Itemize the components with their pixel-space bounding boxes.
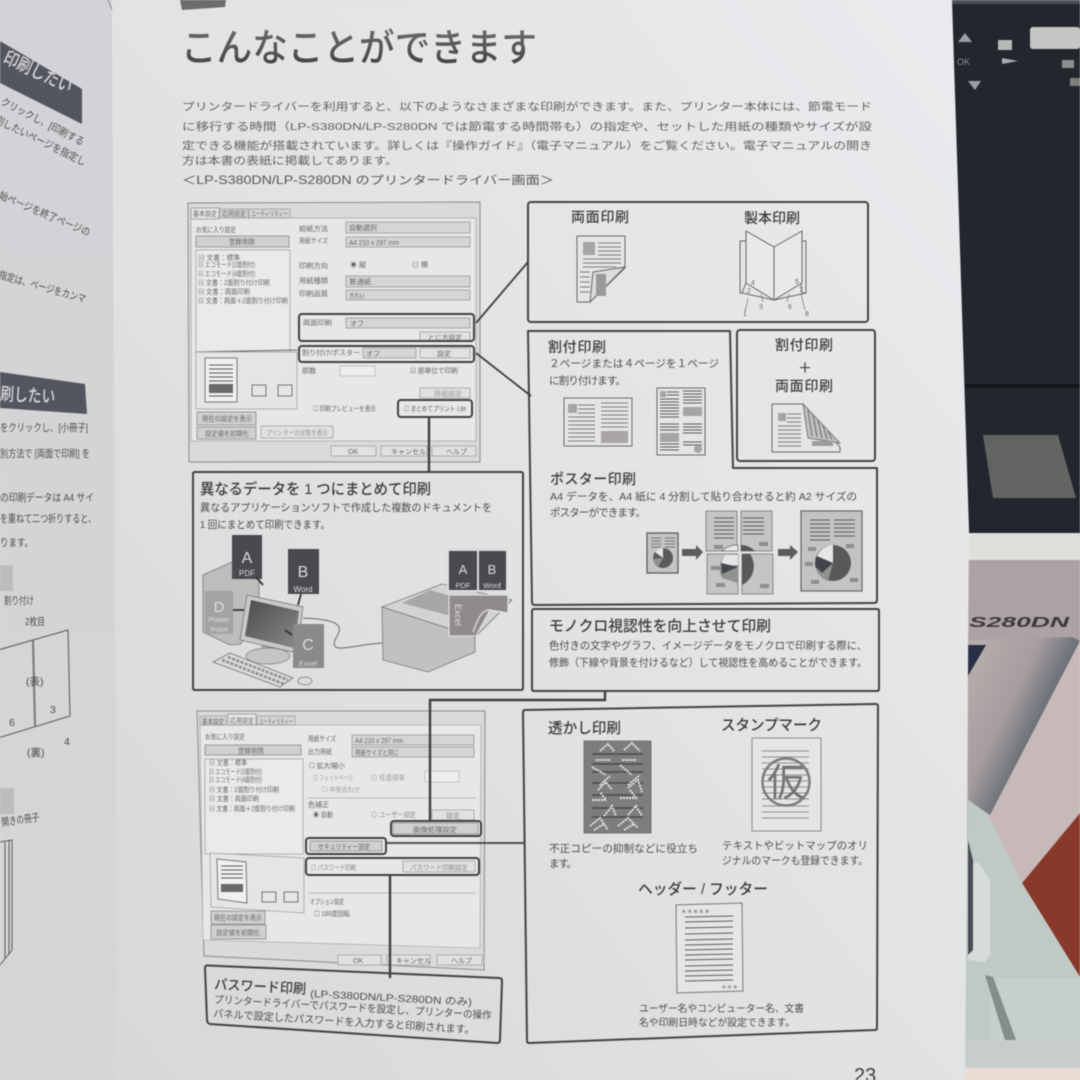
- illustration: PC with documents: Power: [208, 615, 230, 624]
- driver dialog: advanced settings: 設定: [446, 812, 460, 820]
- illustration: PC with documents: D: [214, 599, 225, 616]
- left facing page: 別方法で [両面で印刷] を: [0, 447, 90, 460]
- driver dialog: basic settings: ヘルプ: [446, 448, 467, 456]
- arrow: [778, 545, 798, 560]
- panel: N-up + duplex: 割付印刷: [775, 337, 833, 353]
- panel: password printing: パスワード印刷: [214, 976, 307, 997]
- icon: stamp mark page: [752, 738, 821, 831]
- panel: merge different data: [193, 472, 523, 690]
- illustration: printer with merged output: B: [488, 562, 496, 577]
- driver dialog: advanced settings: 出力用紙: [308, 747, 332, 756]
- icon: large finished poster: [801, 511, 862, 591]
- panel: N-up and poster printing: [528, 331, 877, 605]
- panel: watermark, stamp mark, header/footer: 不正コピーの抑制などに役立ち: [549, 842, 698, 855]
- driver dialog: advanced settings: ☐ 拡大/縮小: [309, 761, 345, 770]
- driver dialog: advanced settings: OK: [353, 958, 363, 965]
- driver dialog: basic settings: ▤ 文書：標準: [198, 253, 240, 262]
- driver dialog: advanced settings: [197, 711, 485, 970]
- main manual page: [112, 0, 969, 1080]
- driver dialog: basic settings: ◎ 横: [412, 260, 428, 269]
- left facing page: 始ページを終了ページの: [0, 189, 92, 239]
- panel: password printing: パネルで設定したパスワードを入力すると印刷されます。: [213, 1007, 475, 1036]
- driver screen caption: ＜LP-S380DN/LP-S280DN のプリンタードライバー画面＞: [182, 174, 554, 187]
- driver dialog: basic settings: ▤ エコモード(4面割付): [198, 269, 255, 278]
- icon: duplex page: [577, 236, 625, 302]
- driver dialog: basic settings: キャンセル: [391, 448, 426, 456]
- icon: header/footer page: ＊＊＊: [721, 984, 738, 991]
- driver dialog: advanced settings: ▤ 文書：2面割り付け印刷: [209, 785, 279, 794]
- driver dialog: basic settings: 設定: [437, 350, 451, 358]
- illustration: printer with merged output: A: [459, 562, 468, 577]
- icon: booklet: 3: [759, 304, 763, 311]
- icon: booklet: 1: [743, 311, 747, 318]
- driver dialog: advanced settings: ◎ 任意倍率: [371, 773, 405, 782]
- left facing page: 印刷したい: [0, 47, 76, 97]
- panel: watermark, stamp mark, header/footer: ます。: [549, 858, 577, 870]
- illustration: printer with merged output: [382, 548, 512, 672]
- panel: N-up and poster printing: ポスター印刷: [550, 471, 636, 487]
- driver dialog: advanced settings: 現在の設定を表示: [214, 913, 262, 922]
- driver dialog: basic settings: お気に入り設定: [196, 225, 236, 234]
- driver dialog: basic settings: ▤ 文書：両面印刷: [198, 287, 250, 296]
- driver dialog: advanced settings: ◉ 自動: [313, 810, 333, 819]
- driver dialog: basic settings: 用紙サイズ: [299, 236, 328, 245]
- driver dialog: basic settings: とじ方設定: [428, 333, 462, 342]
- panel: N-up and poster printing: ポスターができます。: [550, 506, 646, 519]
- icon: booklet: 6: [788, 304, 792, 311]
- panel: N-up + duplex: 両面印刷: [775, 378, 833, 394]
- panel: monochrome visibility: モノクロ視認性を向上させて印刷: [549, 618, 771, 635]
- driver dialog: basic settings: 自動選択: [349, 223, 377, 232]
- arrow: [682, 545, 703, 560]
- icon: booklet: 2: [747, 288, 751, 295]
- panel: password printing: プリンタードライバーでパスワードを設定し、プリンターの操作: [214, 993, 493, 1022]
- left facing page: 割り付け: [4, 594, 34, 607]
- left facing page: [0, 0, 118, 1080]
- driver dialog: basic settings: ▤ 文書：両面＋2面割り付け印刷: [198, 296, 288, 305]
- driver dialog: basic settings: OK: [348, 449, 358, 456]
- driver dialog: basic settings: プリンターの状態を表示: [266, 428, 328, 437]
- left facing page: 2枚目: [25, 615, 45, 628]
- illustration: PC with documents: Point: [210, 625, 228, 634]
- panel: merge different data: 1 回にまとめて印刷できます。: [200, 518, 330, 531]
- driver dialog: advanced settings: ヘルプ: [451, 957, 472, 965]
- intro paragraph: プリンタードライバーを利用すると、以下のようなさまざまな印刷ができます。また、プリンター本体には、節電モード: [182, 100, 872, 113]
- driver dialog: advanced settings: 用紙サイズ: [308, 734, 336, 743]
- driver dialog: advanced settings: ▤ エコモード(4面割付): [209, 775, 262, 784]
- driver dialog: basic settings: ユーティリティー: [251, 210, 288, 218]
- left facing page: 4: [64, 736, 70, 748]
- panel: password printing: [205, 965, 502, 1043]
- panel: duplex and booklet printing: 両面印刷: [571, 209, 629, 225]
- left facing page: 開きの冊子: [1, 812, 40, 829]
- panel: N-up + duplex: ＋: [798, 360, 812, 376]
- driver dialog: advanced settings: ▤ 文書：両面＋2面割り付け印刷: [209, 804, 295, 813]
- intro paragraph: 定できる機能が搭載されています。詳しくは『操作ガイド』（電子マニュアル）をご覧ください。電子マニュアルの開き: [182, 139, 872, 152]
- section tab: [180, 0, 226, 10]
- driver dialog: advanced settings: 基本設定: [202, 717, 224, 726]
- panel: N-up and poster printing: A4 データを、A4 紙に 4 分割して貼り合わせると約 A2 サイズの: [550, 490, 857, 503]
- panel: N-up and poster printing: に割り付けます。: [549, 374, 626, 387]
- panel: monochrome visibility: 色付きの文字やグラフ、イメージデータをモノクロで印刷する際に、: [549, 639, 867, 652]
- icon: 4-up page: [657, 388, 705, 455]
- driver dialog: advanced settings: ユーティリティー: [259, 718, 293, 726]
- icon: 2-up page: [564, 398, 632, 446]
- driver dialog: advanced settings: キャンセル: [396, 957, 431, 965]
- icon: booklet: 7: [799, 287, 803, 294]
- illustration: PC with documents: C: [302, 637, 314, 654]
- left facing page: 指定は、ページをカンマ: [0, 268, 87, 306]
- driver dialog: basic settings: ▤ 文書：2面割り付け印刷: [198, 278, 270, 287]
- panel: merge different data: 異なるアプリケーションソフトで作成した複数のドキュメントを: [200, 501, 492, 514]
- driver dialog: advanced settings: ◎ フィットページ: [313, 774, 353, 782]
- left facing page: クリックし、[印刷する: [0, 95, 87, 148]
- icon: booklet: 5: [795, 279, 799, 286]
- driver dialog: basic settings: 登録/削除: [229, 237, 255, 246]
- driver dialog: basic settings: 部数: [302, 366, 316, 375]
- driver dialog: advanced settings: 登録/削除: [238, 746, 264, 755]
- driver dialog: basic settings: ☑ 部単位で印刷: [410, 366, 458, 375]
- title: こんなことができます: [181, 28, 537, 70]
- driver dialog: advanced settings: パスワード印刷設定: [410, 863, 468, 872]
- icon: header/footer page: ＊＊＊＊＊: [681, 909, 710, 916]
- icon: four poster pieces: [706, 511, 773, 594]
- driver dialog: basic settings: 設定値を初期化: [205, 429, 249, 438]
- icon: booklet: [740, 231, 809, 318]
- left facing page: 6: [9, 717, 15, 729]
- driver dialog: basic settings: 印刷方向: [299, 261, 328, 270]
- panel: N-up + duplex: [737, 330, 875, 461]
- panel: N-up and poster printing: ２ページまたは４ページを１ページ: [549, 358, 719, 370]
- driver dialog: advanced settings: A4 210 x 297 mm: [355, 738, 403, 745]
- driver dialog: advanced settings: お気に入り設定: [205, 732, 245, 741]
- driver dialog: basic settings: 基本設定: [193, 209, 217, 218]
- driver dialog: basic settings: 用紙種類: [299, 276, 328, 285]
- illustration: PC with documents: PDF: [239, 569, 255, 578]
- panel: watermark, stamp mark, header/footer: ジナルのマークも登録できます。: [722, 854, 868, 867]
- driver dialog: basic settings: きれい: [349, 292, 365, 300]
- driver dialog: basic settings: 両面印刷: [303, 318, 332, 327]
- icon: folded N-up page: [772, 404, 840, 452]
- printer model label: S280DN: [969, 614, 1071, 631]
- illustration: PC with documents: [203, 535, 382, 687]
- driver dialog: advanced settings: ☐ 中央合わせ: [322, 785, 360, 794]
- driver dialog: basic settings: 給紙方法: [299, 224, 328, 233]
- driver dialog: basic settings: A4 210 x 297 mm: [349, 240, 399, 247]
- left facing page: を重ねて二つ折りすると、: [0, 512, 96, 525]
- driver dialog: basic settings: 現在の設定を表示: [202, 414, 252, 423]
- background: printer and desk on the right: [940, 0, 1080, 1080]
- driver dialog: advanced settings: 用紙サイズと同じ: [355, 748, 399, 757]
- left facing page: の印刷データは A4 サイ: [0, 491, 94, 504]
- icon: booklet: 8: [805, 311, 809, 318]
- driver dialog: basic settings: 印刷品質: [299, 289, 328, 298]
- left facing page: 刷したい: [0, 384, 56, 407]
- panel: merge different data: 異なるデータを 1 つにまとめて印刷: [200, 480, 431, 498]
- illustration: PC with documents: B: [298, 564, 308, 581]
- driver dialog: advanced settings: 画像処理設定: [413, 825, 457, 834]
- illustration: PC with documents: Word: [294, 585, 312, 594]
- driver dialog: advanced settings: ☐ パスワード印刷: [311, 863, 356, 872]
- panel: monochrome visibility: [532, 609, 879, 691]
- driver dialog: advanced settings: ◎ ユーザー設定: [371, 811, 416, 819]
- connector lines: dialogs to panels: [387, 262, 605, 978]
- driver dialog: basic settings: 応用設定: [222, 210, 246, 218]
- panel: watermark, stamp mark, header/footer: [523, 704, 878, 1043]
- left facing page: 3: [50, 704, 56, 716]
- driver dialog: basic settings: ☐ まとめてプリント Lite: [404, 405, 466, 413]
- icon: header/footer page: [676, 903, 743, 993]
- intro paragraph: 方は本書の表紙に掲載してあります。: [182, 154, 398, 167]
- left facing page: をクリックし、[小冊子]: [0, 422, 88, 434]
- driver dialog: advanced settings: ▤ エコモード(2面割付): [209, 767, 262, 776]
- panel: password printing: (LP-S380DN/LP-S280DN のみ): [310, 989, 472, 1008]
- driver dialog: basic settings: ◉ 縦: [350, 260, 366, 269]
- driver dialog: basic settings: 排紙設定: [434, 389, 462, 398]
- driver dialog: basic settings: ▤ エコモード(2面割付): [198, 260, 255, 269]
- driver dialog: advanced settings: ▤ 文書：両面印刷: [209, 794, 259, 803]
- illustration: PC with documents: A: [242, 550, 253, 567]
- left facing page: (裏): [27, 746, 44, 759]
- panel: monochrome visibility: 修飾（下線や背景を付けるなど）して視認性を高めることができます。: [549, 656, 867, 669]
- panel: watermark, stamp mark, header/footer: スタンプマーク: [721, 717, 822, 734]
- intro paragraph: [182, 100, 873, 167]
- panel: watermark, stamp mark, header/footer: テキストやビットマップのオリ: [722, 840, 868, 852]
- left facing page: (表): [26, 676, 44, 688]
- panel: watermark, stamp mark, header/footer: 透かし印刷: [548, 720, 621, 737]
- driver dialog: basic settings: ☐ 印刷プレビューを表示: [313, 404, 376, 413]
- left facing page: ります。: [0, 537, 33, 549]
- printer control panel: [957, 27, 1080, 498]
- driver dialog: advanced settings: オプション設定: [310, 898, 344, 906]
- panel: watermark, stamp mark, header/footer: ユーザー名やコンピューター名、文書: [639, 1002, 804, 1015]
- driver dialog: advanced settings: 設定値を初期化: [216, 928, 260, 937]
- driver dialog: advanced settings: 応用設定: [230, 717, 254, 725]
- panel: duplex and booklet printing: 製本印刷: [744, 210, 800, 226]
- illustration: printer with merged output: Excel: [453, 604, 463, 626]
- icon: booklet: 4: [751, 280, 755, 287]
- driver dialog: advanced settings: ☐ 180度回転: [314, 909, 350, 918]
- panel: N-up and poster printing: 割付印刷: [548, 339, 606, 355]
- panel: watermark, stamp mark, header/footer: 名や印刷日時などが設定できます。: [639, 1016, 795, 1029]
- driver dialog: advanced settings: セキュリティー設定: [318, 843, 370, 851]
- panel: duplex and booklet printing: [528, 202, 868, 322]
- driver dialog: basic settings: オフ: [366, 350, 380, 358]
- driver dialog: basic settings: 割り付け/ポスター: [302, 348, 360, 357]
- driver dialog: advanced settings: 色補正: [308, 800, 329, 809]
- intro paragraph: に移行する時間（LP-S380DN/LP-S280DN では節電する時間帯も）の指定や、セットした用紙の種類やサイズが設: [182, 120, 873, 133]
- driver dialog: basic settings: 普通紙: [349, 277, 371, 286]
- icon: small source poster: [647, 533, 678, 573]
- printer control panel: OK: [957, 57, 970, 67]
- icon: stamp mark page: 仮: [767, 763, 805, 805]
- panel: watermark, stamp mark, header/footer: ヘッダー / フッター: [638, 880, 768, 898]
- driver dialog: basic settings: オフ: [350, 320, 364, 328]
- driver dialog: basic settings: [188, 202, 480, 462]
- illustration: printer with merged output: PDF: [456, 581, 471, 590]
- icon: watermark page: [584, 741, 651, 833]
- illustration: printer with merged output: Word: [483, 581, 501, 590]
- illustration: PC with documents: Excel: [299, 659, 318, 668]
- driver dialog: advanced settings: ▤ 文書：標準: [209, 758, 247, 767]
